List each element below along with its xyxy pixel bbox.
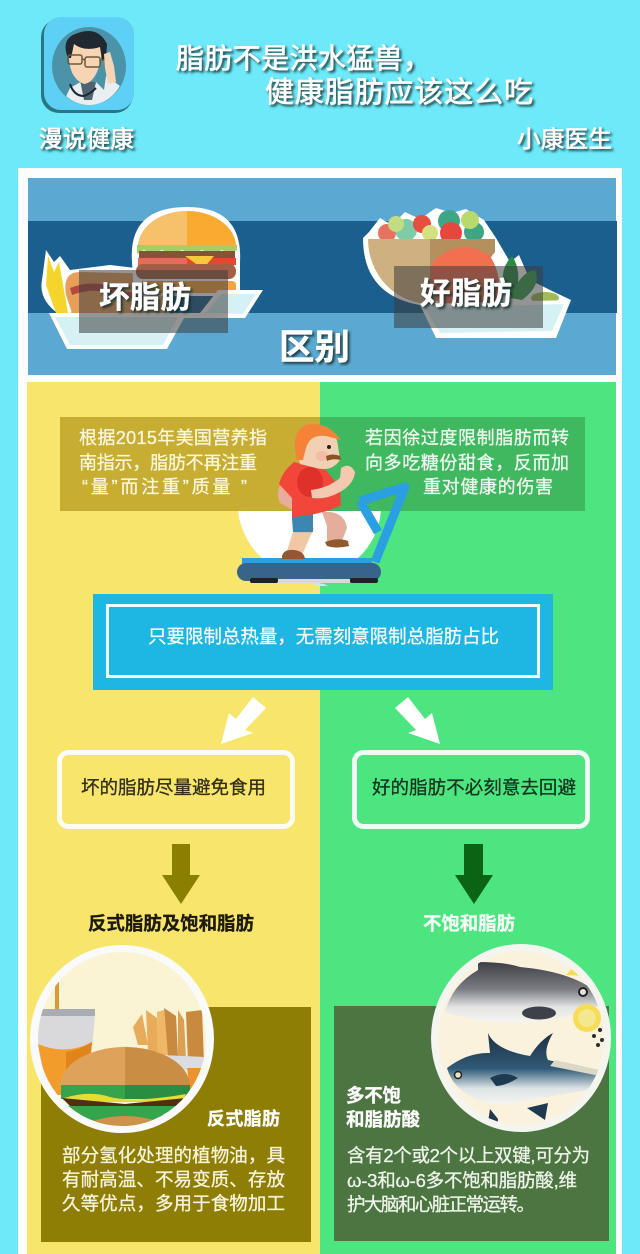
arrow: white to good fat <box>395 697 440 744</box>
subheading: polyunsaturated fatty acid <box>346 1085 420 1130</box>
title: 脂肪不是洪水猛兽， <box>176 43 431 74</box>
description: polyunsaturated fatty acid <box>347 1145 590 1215</box>
description: trans fat: 有耐高温、不易变质、存放 <box>62 1169 285 1190</box>
icon: burger and hot dog plate <box>41 207 263 349</box>
arrow: white to bad fat <box>221 697 266 744</box>
icon: salad bowl and salmon <box>363 208 571 338</box>
subheading: polyunsaturated fatty acid: 多不饱 <box>346 1085 401 1106</box>
panel: polyunsaturated fat <box>334 944 620 1241</box>
box: bad fat advice <box>60 752 292 826</box>
box: bad fat advice: 坏的脂肪尽量避免食用 <box>81 777 266 798</box>
text block: right intro: 向多吃糖份甜食，反而加 <box>365 453 569 473</box>
good fat label: 好脂肪 <box>420 277 512 311</box>
icon: fast food circle <box>30 945 220 1133</box>
icon: doctor app logo <box>41 17 134 113</box>
good fat label <box>394 266 543 328</box>
bad fat label: 坏脂肪 <box>99 281 191 315</box>
heading: trans and saturated fat: 反式脂肪及饱和脂肪 <box>88 913 254 934</box>
subheading: trans fat: 反式脂肪 <box>207 1109 280 1129</box>
box: good fat advice: 好的脂肪不必刻意去回避 <box>372 777 576 798</box>
title <box>176 43 533 109</box>
text block: right intro: 重对健康的伤害 <box>423 477 553 497</box>
box: good fat advice <box>354 752 588 826</box>
icon: man running on treadmill <box>237 424 405 586</box>
description: trans fat <box>62 1145 285 1214</box>
heading: difference: 区别 <box>279 327 350 367</box>
panel: header comparison <box>28 178 617 375</box>
description: polyunsaturated fatty acid: 护大脑和心脏正常运转。 <box>347 1194 535 1215</box>
text block: left intro <box>60 417 320 511</box>
text block: left intro: 南指示，脂肪不再注重 <box>79 453 257 473</box>
brand name: 漫说健康 <box>39 126 134 152</box>
author name: 小康医生 <box>517 126 612 152</box>
panel: trans fat <box>30 945 311 1242</box>
white circle behind runner <box>238 511 381 558</box>
arrow: olive down <box>162 844 200 904</box>
text block: right intro: 若因徐过度限制脂肪而转 <box>365 428 569 448</box>
text block: left intro: 根据2015年美国营养指 <box>79 428 267 448</box>
bad fat label <box>79 270 228 333</box>
icon: fish circle <box>430 944 620 1135</box>
subheading: polyunsaturated fatty acid: 和脂肪酸 <box>346 1109 420 1130</box>
panel: yellow and green background <box>27 382 616 1254</box>
description: trans fat: 部分氢化处理的植物油，具 <box>62 1145 285 1166</box>
description: trans fat: 久等优点，多用于食物加工 <box>62 1193 285 1214</box>
description: polyunsaturated fatty acid: 含有2个或2个以上双键,可分为 <box>347 1145 590 1166</box>
heading: unsaturated fat: 不饱和脂肪 <box>423 913 515 934</box>
text block: right intro <box>320 417 585 511</box>
arrow: green down <box>455 844 493 904</box>
text block: left intro: “量”而注重”质量 ” <box>82 477 247 497</box>
callout: total calories <box>93 594 553 690</box>
description: polyunsaturated fatty acid: ω-3和ω-6多不饱和脂肪酸,维 <box>347 1170 577 1191</box>
title: 健康脂肪应该这么吃 <box>265 76 533 109</box>
callout: total calories: 只要限制总热量，无需刻意限制总脂肪占比 <box>148 626 499 647</box>
